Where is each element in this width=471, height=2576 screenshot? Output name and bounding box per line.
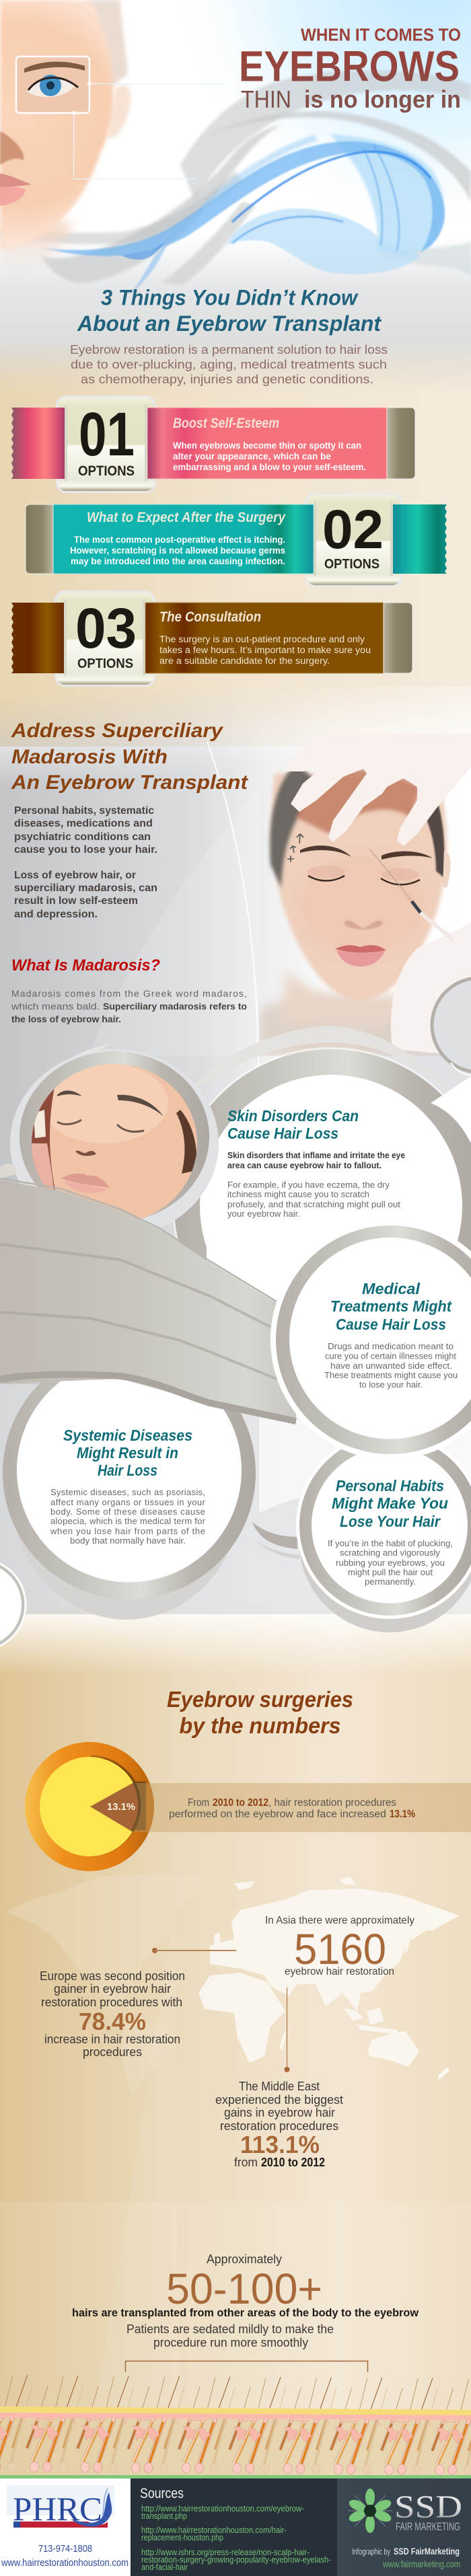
definition text: the loss of eyebrow hair. [11, 1014, 121, 1024]
text: systemic diseases: body that normally have hair. [70, 1536, 186, 1546]
hair [270, 763, 451, 888]
heading: surgeries by the numbers: by the numbers [179, 1713, 340, 1738]
photo circle: woman with closed eyes [10, 1044, 219, 1238]
ribbon band [11, 405, 415, 482]
glove: top hand [283, 733, 471, 846]
text: medical treatments: have an unwanted side effect. [330, 1361, 452, 1371]
stat: asia 5160: In Asia there were approximately [265, 1915, 414, 1926]
heading: address madarosis: Madarosis With [11, 746, 168, 768]
body text: causes of hair loss: and depression. [14, 909, 98, 920]
text: systemic diseases: alopecia, which is the medical term for [50, 1516, 206, 1526]
text: personal habits: rubbing your eyebrows, you [336, 1558, 445, 1568]
ribbon band [11, 600, 412, 676]
ribbon text: are a suitable candidate for the surgery. [159, 656, 330, 666]
text: medical treatments: to lose your hair. [359, 1379, 423, 1390]
text: skin disorders: itchiness might cause you to scratch [227, 1189, 369, 1199]
stat: middle east 113.1% [215, 2079, 343, 2169]
stat: europe 78.4% [40, 1969, 185, 2059]
text: systemic diseases: affect many organs or tissues in your [50, 1497, 206, 1507]
body text: causes of hair loss: Personal habits, systematic [14, 805, 154, 817]
callout lines from eye frame [72, 81, 225, 179]
stat: 50-100+ hairs [72, 2252, 419, 2349]
badge 03: OPTIONS [77, 656, 133, 671]
footer panel: sources: transplant.php [141, 2511, 187, 2521]
stat: europe 78.4%: gainer in eyebrow hair [54, 1981, 171, 1996]
ribbon text: The surgery is an out-patient procedure and only [159, 634, 365, 644]
wedge [90, 1782, 139, 1831]
text: medical treatments [324, 1280, 458, 1390]
heading: address madarosis: Address Superciliary [11, 720, 223, 742]
text: skin disorders: Skin disorders that inflame and irritate the eye [227, 1151, 405, 1160]
nose [344, 921, 383, 930]
text: personal habits: permanently. [365, 1577, 416, 1587]
badge 01 [56, 395, 156, 493]
text: medical treatments: These treatments might cause you [324, 1370, 458, 1380]
background: tan band [0, 336, 471, 747]
bracket [125, 2361, 367, 2372]
panel: option 01 ribbon [11, 395, 415, 493]
body text: causes of hair loss: diseases, medications and [14, 818, 153, 829]
text: medical treatments: Cause Hair Loss [336, 1316, 446, 1333]
text: skin disorders: Skin Disorders Can [227, 1107, 359, 1125]
closed eyes [307, 866, 419, 880]
body text: causes of hair loss [14, 805, 157, 920]
definition text [11, 988, 247, 1024]
stat: europe 78.4%: procedures [83, 2045, 142, 2059]
text: skin disorders [227, 1107, 405, 1219]
ribbon text: embarrassing and a blow to your self-esteem. [173, 462, 366, 472]
footer panel: sources: http://www.hairrestorationhouston.com/hair- [141, 2526, 287, 2535]
intro paragraph [70, 342, 388, 386]
footer panel: SSD Fair Marketing: SSD [394, 2489, 462, 2525]
intro paragraph: Eyebrow restoration is a permanent solution to hair loss [70, 342, 388, 356]
small ring top right [431, 977, 471, 1075]
text: personal habits: If you’re in the habit of plucking, [328, 1538, 453, 1548]
footer panel: SSD Fair Marketing [337, 2478, 471, 2576]
text: personal habits: scratching and vigorously [340, 1548, 440, 1558]
ribbon text: takes a few hours. It’s important to make sure you [159, 645, 371, 655]
nose shading [0, 131, 24, 165]
text: systemic diseases: Hair Loss [98, 1462, 157, 1479]
hero illustration: blue swoosh [40, 134, 445, 296]
background: header sky [0, 0, 471, 404]
title: is no longer in [304, 85, 461, 113]
definition text: which means bald. [11, 1001, 100, 1012]
lips [335, 945, 386, 967]
text: systemic diseases: when you lose hair from parts of the [50, 1526, 205, 1536]
stat: 50-100+ hairs: hairs are transplanted from other areas of the body to the eyebrow [72, 2306, 419, 2319]
brows [300, 845, 433, 860]
connector: europe [152, 1948, 236, 1953]
text: medical treatments: Drugs and medication meant to [328, 1341, 454, 1351]
text: skin disorders: area can cause eyebrow hair to fallout. [227, 1161, 382, 1170]
text: skin disorders: profusely, and that scratching might pull out [227, 1199, 400, 1209]
stat text: 13.1% increase: 2010 to 2012 [213, 1797, 268, 1809]
footer panel: sources: restoration-surgery-growing-popularity-eyebrow-eyelash- [141, 2555, 331, 2565]
stat: 50-100+ hairs: procedure run more smoothly [153, 2335, 309, 2349]
grey wave band [0, 1164, 296, 1423]
footer panel: PHRC [0, 2478, 131, 2576]
background: tan lower section [0, 1601, 471, 2478]
text: skin disorders: your eyebrow hair. [227, 1209, 300, 1219]
stat: middle east 113.1%: 113.1% [240, 2131, 320, 2158]
connector: middle east [284, 1987, 289, 2072]
ribbon text [159, 609, 371, 666]
text: personal habits [328, 1477, 453, 1587]
panel: personal habits circle [296, 1432, 471, 1632]
stat: asia 5160: 5160 [294, 1925, 386, 1973]
panel: option 03 ribbon [11, 591, 412, 687]
heading: address madarosis: An Eyebrow Transplant [11, 771, 249, 794]
panel: systemic diseases circle [3, 1347, 256, 1620]
hero portrait: woman's face [0, 0, 131, 282]
stat: middle east 113.1%: restoration procedures [220, 2119, 338, 2133]
stat text: 13.1% increase [169, 1797, 415, 1820]
footer panel: PHRC: 713-974-1808 [38, 2543, 92, 2554]
body text: causes of hair loss: result in low self-esteem [14, 895, 138, 907]
heading: surgeries by the numbers [167, 1687, 353, 1738]
body text: causes of hair loss: Loss of eyebrow hair, or [14, 870, 136, 881]
ribbon text: However, scratching is not allowed because germs [70, 545, 285, 556]
badge 01: OPTIONS [78, 463, 135, 479]
ribbon text: The Consultation [159, 609, 261, 625]
ribbon text: What to Expect After the Surgery [87, 510, 286, 525]
heading: 3 things: 3 Things You Didn’t Know [101, 285, 359, 309]
heading: what is madarosis: What Is Madarosis? [11, 956, 160, 975]
text: systemic diseases: body. Some of these diseases cause [50, 1507, 205, 1517]
ribbon text [70, 510, 286, 566]
background: circles section [0, 1384, 471, 1614]
badge 03: 03 [75, 597, 137, 660]
stat text: 13.1% increase: 13.1% [390, 1809, 415, 1820]
ribbon band [26, 502, 447, 576]
text: medical treatments: Treatments Might [330, 1297, 452, 1315]
body text: causes of hair loss: psychiatric conditions can [14, 831, 151, 843]
text: skin disorders: Cause Hair Loss [227, 1125, 338, 1142]
text: medical treatments: Medical [362, 1280, 421, 1297]
small crescent [252, 1522, 299, 1559]
footer panel: SSD Fair Marketing: Infographic by [352, 2546, 390, 2556]
heading: 3 things: About an Eyebrow Transplant [77, 311, 382, 336]
footer panel: sources: replacement-houston.php [141, 2533, 223, 2542]
text: systemic diseases [50, 1427, 206, 1546]
stat: europe 78.4%: Europe was second position [40, 1969, 185, 1983]
decorative white arc [207, 742, 258, 1076]
stat: europe 78.4%: restoration procedures with [41, 1995, 182, 2009]
pie chart: 13.1%: 13.1% [107, 1801, 135, 1813]
lips [0, 174, 32, 206]
stat: middle east 113.1%: from [234, 2155, 258, 2169]
panel: medical treatments circle [270, 1220, 471, 1460]
definition text: Madarosis comes from the Greek word madaros, [11, 988, 247, 999]
body text: causes of hair loss: superciliary madarosis, can [14, 882, 157, 894]
stat text: 13.1% increase: , hair restoration procedures [268, 1797, 396, 1809]
panel: skin disorders circle [172, 1026, 471, 1365]
stat: middle east 113.1%: The Middle East [239, 2079, 320, 2093]
text: systemic diseases: Might Result in [77, 1444, 178, 1462]
stat text: 13.1% increase: performed on the eyebrow and face increased [169, 1809, 386, 1820]
stat: asia 5160: eyebrow hair restoration [285, 1966, 394, 1977]
stat text: 13.1% increase: From [188, 1797, 209, 1809]
stat: middle east 113.1%: gains in eyebrow hair [224, 2105, 335, 2119]
ribbon text [173, 416, 366, 472]
text: personal habits: Personal Habits [336, 1477, 444, 1494]
ribbon text: may be introduced into the area causing infection. [71, 556, 285, 566]
panel: option 02 ribbon [26, 493, 447, 587]
intro paragraph: due to over-plucking, aging, medical treatments such [71, 357, 387, 371]
world map [6, 1873, 460, 2094]
footer panel: sources [131, 2478, 337, 2576]
body text: causes of hair loss: cause you to lose your hair. [14, 844, 157, 856]
definition text: Superciliary madarosis refers to [103, 1001, 247, 1012]
small ring bottom left [0, 1559, 26, 1651]
stat: 50-100+ hairs: 50-100+ [166, 2265, 322, 2313]
stat: middle east 113.1%: 2010 to 2012 [261, 2155, 325, 2169]
heading: address madarosis [11, 720, 249, 794]
footer panel: sources: http://www.ishrs.org/press-release/non-scalp-hair- [141, 2548, 310, 2557]
stat: 50-100+ hairs: Approximately [207, 2252, 282, 2266]
badge 02 [305, 493, 402, 587]
ribbon text: Boost Self-Esteem [173, 416, 279, 431]
badge 01: 01 [79, 400, 135, 469]
stat: europe 78.4%: increase in hair restoration [44, 2032, 180, 2046]
syringe [369, 849, 454, 940]
pie chart: 13.1% [25, 1742, 471, 1871]
intro paragraph: as chemotherapy, injuries and genetic conditions. [81, 372, 373, 386]
badge 02: OPTIONS [324, 557, 379, 572]
drawn arrows [287, 834, 303, 862]
title: THIN [241, 85, 291, 113]
text: systemic diseases: Systemic diseases, such as psoriasis, [50, 1487, 205, 1497]
title [239, 24, 461, 113]
text: systemic diseases: Systemic Diseases [63, 1427, 192, 1444]
heading: 3 things [77, 285, 382, 336]
eye close-up frame [16, 56, 89, 113]
PHRC logo: PHRC [13, 2490, 102, 2528]
ribbon text: When eyebrows become thin or spotty it can [173, 441, 361, 451]
stat: europe 78.4%: 78.4% [79, 2008, 146, 2035]
text: personal habits: Lose Your Hair [340, 1513, 441, 1530]
stat: asia 5160 [265, 1915, 414, 1977]
icon: green flower [347, 2489, 393, 2533]
badge 03 [55, 591, 155, 687]
footer panel: sources: Sources [140, 2486, 184, 2501]
background: grey-white body [0, 686, 471, 1392]
ribbon text: The most common post-operative effect is itching. [74, 535, 285, 545]
forehead shadow between gloves [296, 768, 421, 834]
footer panel: PHRC: www.hairrestorationhouston.com [1, 2557, 129, 2569]
stat: 50-100+ hairs: Patients are sedated mildly to make the [126, 2322, 334, 2336]
text: personal habits: Might Make You [332, 1494, 448, 1512]
hero illustration: grey swoosh ribbons [0, 70, 471, 286]
hair follicle cross-section [0, 2376, 471, 2475]
callout band [134, 1783, 471, 1832]
stat: middle east 113.1%: experienced the biggest [215, 2092, 343, 2107]
badge 02: 02 [322, 499, 384, 560]
text: personal habits: might pull the hair out [348, 1567, 433, 1577]
text: skin disorders: For example, if you have eczema, the dry [227, 1180, 390, 1190]
heading: surgeries by the numbers: Eyebrow surgeries [167, 1687, 353, 1712]
ribbon text: alter your appearance, which can be [173, 451, 331, 461]
footer panel: sources: and-facial-hair [141, 2563, 188, 2572]
glove: lower hand [391, 921, 471, 1056]
photo: woman receiving eyebrow injection [259, 733, 471, 1056]
title: WHEN IT COMES TO [301, 24, 461, 44]
text: medical treatments: cure you of certain illnesses might [325, 1351, 456, 1361]
footer green rule [0, 2475, 471, 2478]
footer panel: sources: http://www.hairrestorationhouston.com/eyebrow- [141, 2504, 304, 2513]
